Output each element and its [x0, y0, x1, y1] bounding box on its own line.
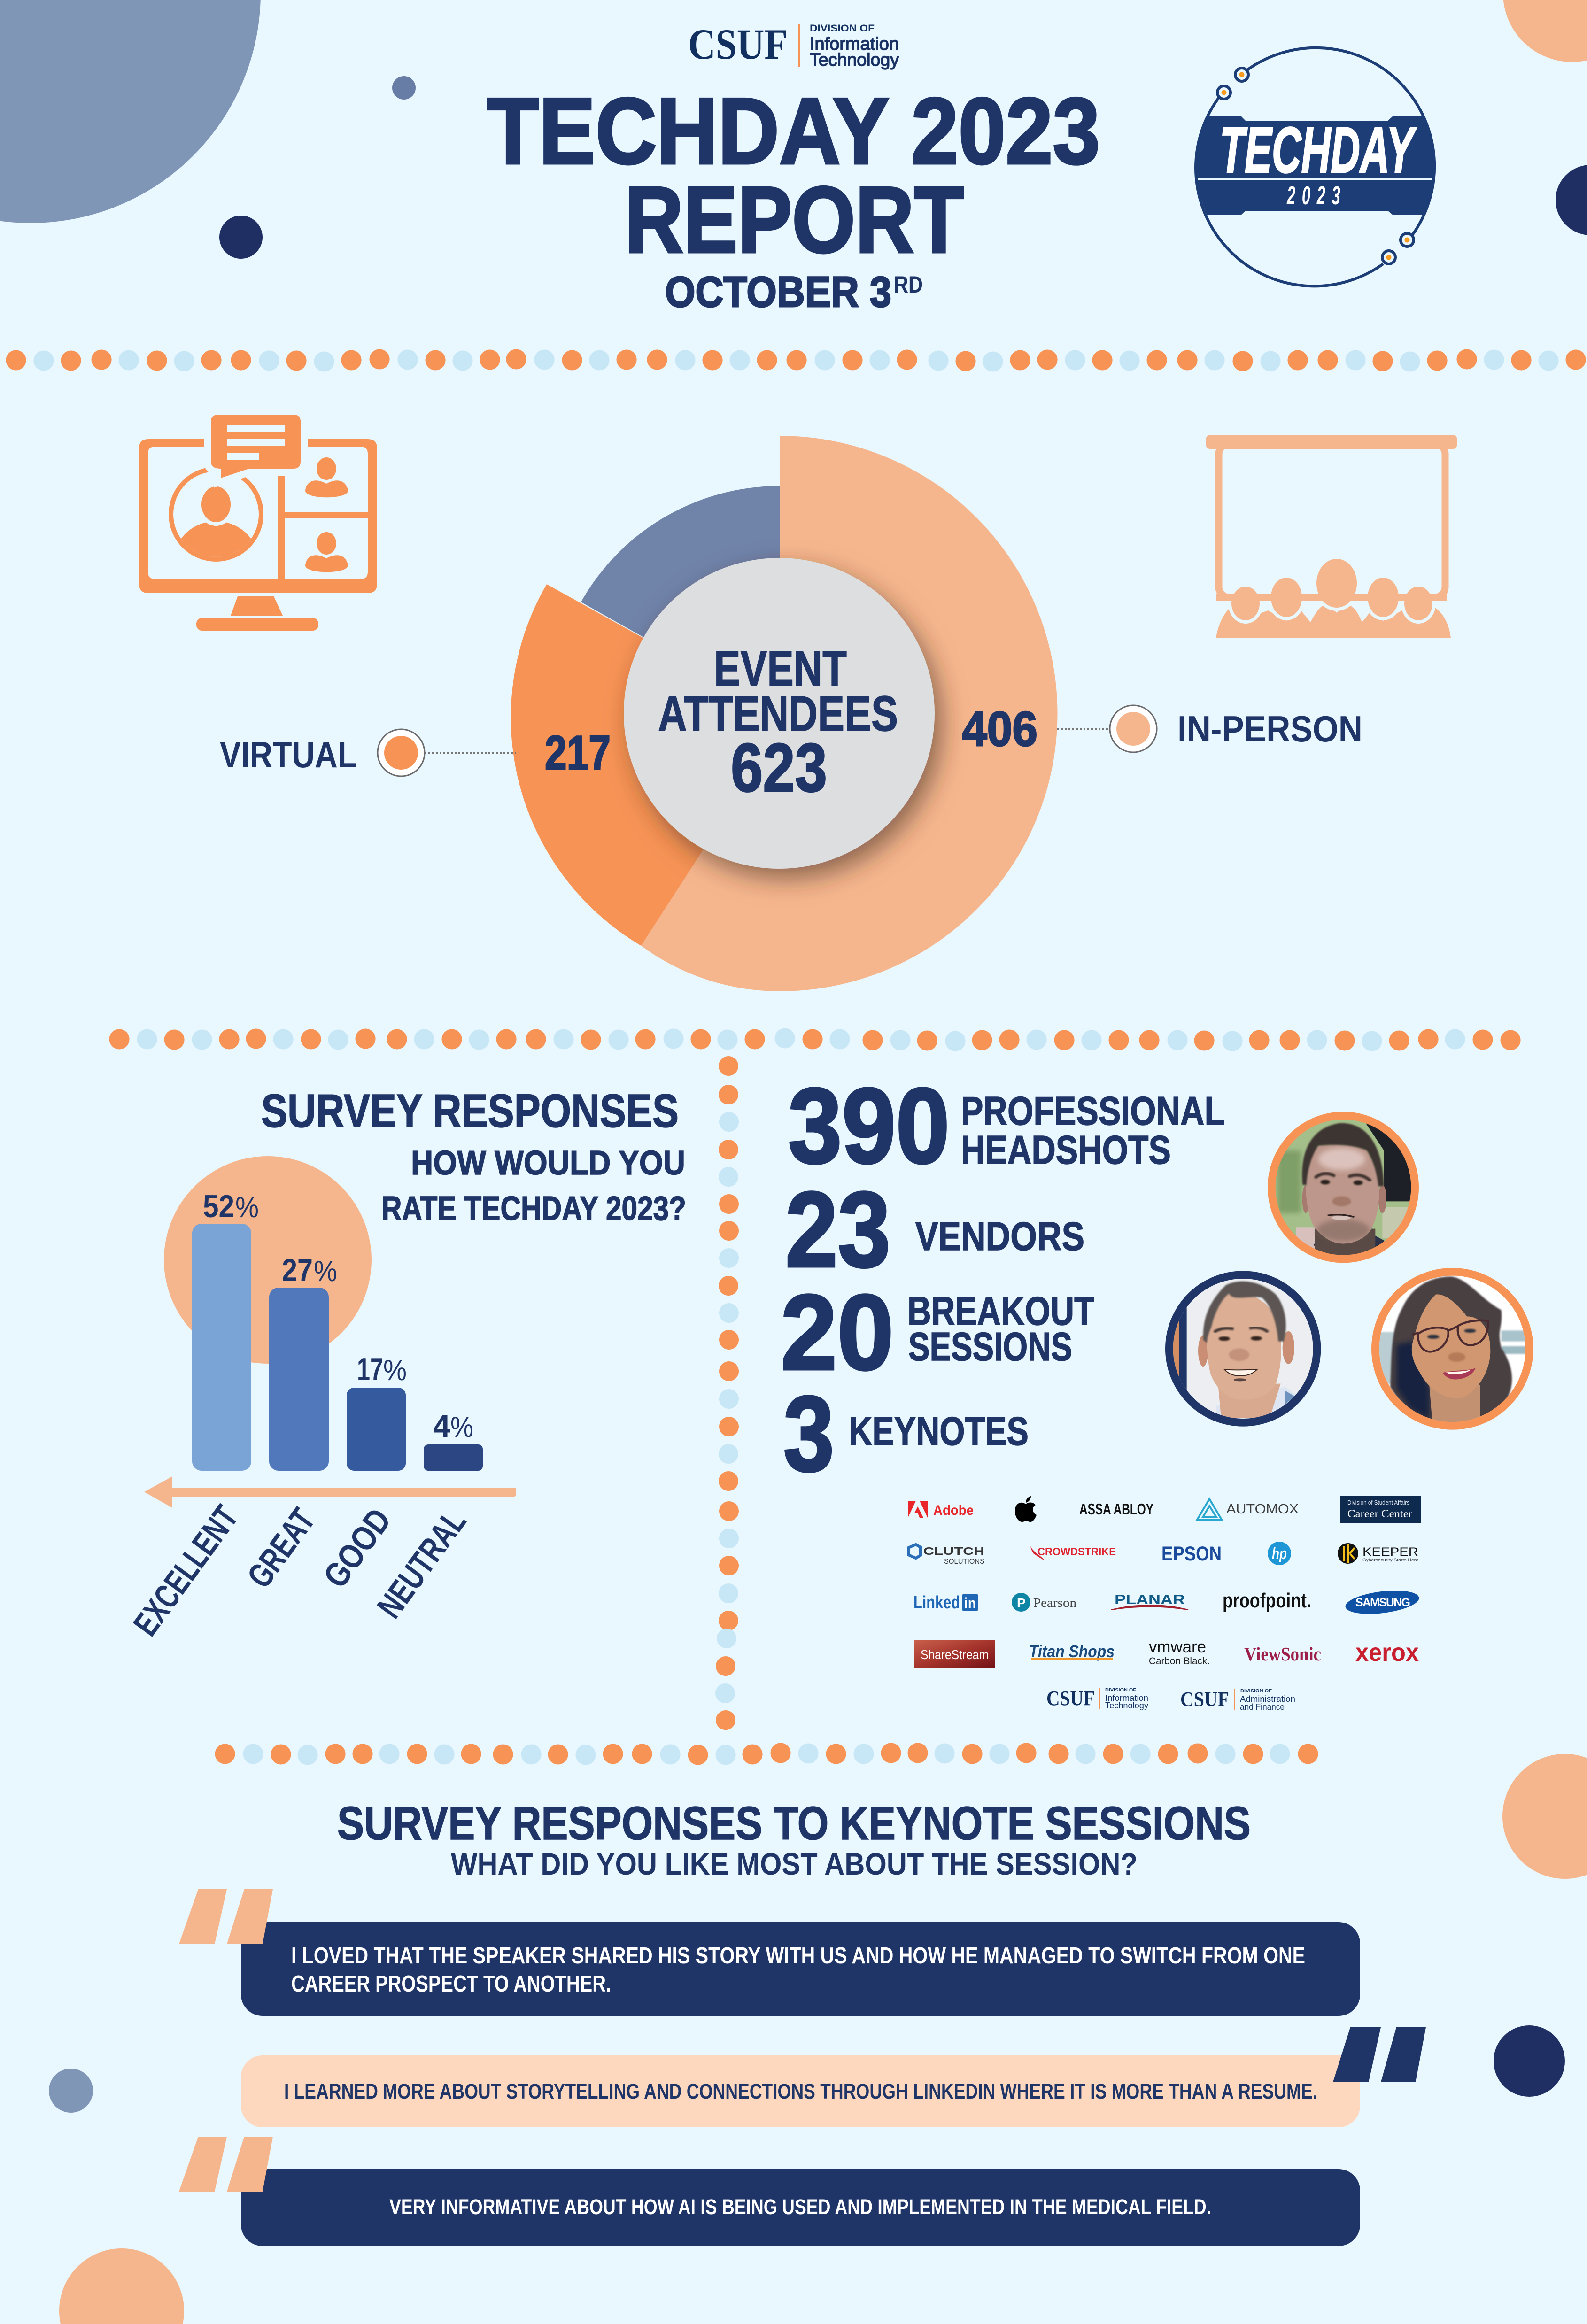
heading: survey responses [261, 1085, 686, 1228]
logo: ViewSonic: ViewSonic [1244, 1643, 1321, 1665]
logo: Adobe [908, 1501, 974, 1518]
quote card two [241, 2055, 1360, 2127]
bar: great [269, 1252, 337, 1471]
donut segment: virtual [511, 584, 791, 946]
logo: Pearson [1012, 1593, 1077, 1612]
logo: Automox: AUTOMOX [1226, 1502, 1299, 1517]
logo: LinkedIn: Linked [913, 1593, 960, 1613]
logo: Apple [1015, 1496, 1037, 1522]
bar: good [347, 1351, 407, 1471]
axis labels: GREAT [240, 1501, 323, 1595]
stat: keynotes: 3 [783, 1374, 834, 1494]
logo: Career Center [1340, 1496, 1421, 1523]
logo: LinkedIn: in [964, 1595, 976, 1612]
stat: headshots: HEADSHOTS [961, 1128, 1171, 1173]
logo: CSUF Information Technology: Technology [1105, 1701, 1148, 1710]
heading: keynote survey [337, 1797, 1251, 1881]
dotted divider top [16, 359, 1576, 362]
donut chart: event attendees [511, 436, 1058, 991]
logo: CSUF Information Technology: DIVISION OF [1105, 1688, 1136, 1693]
TechDay badge: 2023 [1286, 181, 1347, 210]
stat: keynotes [783, 1374, 1029, 1494]
title [487, 79, 1100, 272]
stat: headshots [788, 1066, 1225, 1186]
centre label: ATTENDEES [658, 686, 898, 741]
logo: Proofpoint: proofpoint. [1223, 1589, 1311, 1612]
date: RD [894, 271, 923, 298]
logo: Clutch Solutions: SOLUTIONS [944, 1558, 984, 1566]
icon: in-person audience and screen [1206, 435, 1457, 638]
logo: Clutch Solutions [908, 1544, 984, 1566]
logo: Career Center: Career Center [1347, 1508, 1412, 1520]
donut segment: in-person [641, 436, 1058, 991]
logo: CSUF Administration and Finance: Administration [1240, 1694, 1295, 1704]
logo: CrowdStrike: CROWDSTRIKE [1037, 1545, 1116, 1558]
stat: vendors: 23 [785, 1170, 890, 1289]
bar: neutral: % [450, 1411, 473, 1444]
title: TECHDAY 2023 [487, 79, 1100, 184]
bar: good: % [383, 1354, 407, 1387]
bar: good: 17 [357, 1351, 383, 1387]
logo: VMware Carbon Black [1149, 1637, 1210, 1667]
dotted divider middle [119, 1038, 1510, 1041]
stat: breakout sessions: SESSIONS [908, 1325, 1072, 1369]
bar chart: TechDay rating [164, 1156, 483, 1471]
legend: in-person: IN-PERSON [1177, 708, 1362, 749]
logo: Pearson: P [1017, 1596, 1026, 1610]
portrait: keynote speaker one [1271, 1116, 1415, 1259]
logo: Pearson: Pearson [1033, 1596, 1077, 1610]
stat: vendors [785, 1170, 1084, 1289]
logo: Keeper [1338, 1543, 1418, 1564]
logo: Keeper: Cybersecurity Starts Here [1362, 1558, 1418, 1562]
axis labels: GOOD [316, 1501, 399, 1595]
logo: Adobe: Adobe [933, 1503, 974, 1518]
bar: neutral: 4 [433, 1408, 450, 1444]
stat: breakout sessions: BREAKOUT [907, 1289, 1094, 1334]
logo: ShareStream [914, 1640, 995, 1668]
logo: Samsung [1344, 1587, 1420, 1617]
logo: Automox [1197, 1499, 1299, 1520]
in-person value: 406 [962, 702, 1037, 757]
CSUF division logo [688, 20, 899, 70]
stat: vendors: VENDORS [915, 1214, 1084, 1259]
centre label: 623 [731, 729, 827, 806]
logo: CSUF Administration and Finance: CSUF [1180, 1688, 1229, 1711]
icon: opening quote one [179, 1889, 273, 1944]
centre label: EVENT [714, 641, 847, 696]
title: REPORT [625, 168, 964, 272]
logo: Samsung: SAMSUNG [1355, 1596, 1410, 1609]
portrait: keynote speaker two [1169, 1275, 1317, 1422]
quote card one [241, 1922, 1360, 2016]
logo: VMware Carbon Black: Carbon Black. [1149, 1656, 1210, 1667]
logo: HP [1268, 1542, 1291, 1565]
logo: Planar [1111, 1592, 1188, 1610]
centre label [658, 641, 898, 806]
stat: headshots: PROFESSIONAL [961, 1089, 1225, 1134]
stat: breakout sessions: 20 [781, 1273, 894, 1392]
legend: virtual [220, 729, 516, 776]
axis labels: NEUTRAL [370, 1503, 473, 1625]
icon: opening quote two [179, 2137, 273, 2192]
quote card three: VERY INFORMATIVE ABOUT HOW AI IS BEING USED AND IMPLEMENTED IN THE MEDICAL FIELD. [389, 2195, 1211, 2219]
stat: headshots: 390 [788, 1066, 950, 1186]
logo: CSUF Administration and Finance [1180, 1688, 1295, 1712]
logo: VMware Carbon Black: vmware [1149, 1637, 1206, 1656]
logo: Career Center: Division of Student Affairs [1347, 1499, 1409, 1506]
CSUF division logo: Information [810, 34, 899, 54]
logo: Epson: EPSON [1161, 1543, 1222, 1565]
bar: excellent: 52 [203, 1189, 234, 1224]
quote card one: I LOVED THAT THE SPEAKER SHARED HIS STORY WITH US AND HOW HE MANAGED TO SWITCH FROM ONE [291, 1943, 1305, 1969]
stat: keynotes: KEYNOTES [849, 1409, 1029, 1454]
dotted divider vertical [725, 1066, 729, 1720]
donut segment: remainder [581, 486, 780, 714]
legend: virtual: VIRTUAL [220, 734, 357, 775]
TechDay badge [1194, 46, 1436, 287]
icon: closing quote [1333, 2027, 1426, 2082]
logo: Clutch Solutions: CLUTCH [923, 1545, 984, 1557]
logo: CSUF Information Technology: CSUF [1046, 1687, 1095, 1710]
logo: Xerox: xerox [1355, 1638, 1419, 1667]
logo: CSUF Administration and Finance: and Finance [1240, 1702, 1285, 1712]
TechDay badge: TECHDAY [1220, 114, 1417, 186]
arrow: rating scale [144, 1476, 516, 1508]
sponsor logos [908, 1496, 1421, 1712]
logo: HP: hp [1272, 1545, 1287, 1563]
date: OCTOBER 3 [665, 268, 891, 316]
logo: CSUF Information Technology [1046, 1687, 1148, 1710]
dotted divider bottom [225, 1753, 1308, 1755]
logo: Planar: PLANAR [1115, 1592, 1185, 1607]
quote card one: CAREER PROSPECT TO ANOTHER. [291, 1971, 611, 1997]
axis labels [126, 1498, 473, 1643]
CSUF division logo: Technology [810, 50, 899, 70]
bar: great: 27 [282, 1252, 313, 1288]
bar: great: % [314, 1255, 337, 1288]
logo: Keeper: KEEPER [1362, 1545, 1418, 1559]
bar: excellent [192, 1189, 259, 1471]
heading: survey responses: SURVEY RESPONSES [261, 1085, 679, 1137]
logo: CSUF Information Technology: Information [1105, 1693, 1148, 1703]
virtual value: 217 [545, 726, 611, 780]
logo: Assa Abloy: ASSA ABLOY [1079, 1500, 1153, 1518]
heading: survey responses: HOW WOULD YOU [411, 1144, 685, 1182]
logo: ShareStream: ShareStream [921, 1647, 989, 1662]
quote card two: I LEARNED MORE ABOUT STORYTELLING AND CONNECTIONS THROUGH LINKEDIN WHERE IT IS MORE THAN A RESUME. [284, 2079, 1317, 2103]
CSUF division logo: CSUF [688, 20, 788, 68]
portrait: keynote speaker three [1375, 1272, 1529, 1426]
quote card three [241, 2169, 1360, 2246]
legend: in-person [1057, 705, 1362, 752]
donut centre [624, 558, 935, 869]
stat: breakout sessions [781, 1273, 1094, 1392]
heading: keynote survey: WHAT DID YOU LIKE MOST ABOUT THE SESSION? [451, 1846, 1138, 1881]
icon: virtual meeting monitor [139, 415, 377, 631]
bar: excellent: % [235, 1191, 259, 1224]
bar: neutral [424, 1408, 483, 1471]
CSUF division logo: DIVISION OF [810, 23, 875, 34]
axis labels: EXCELLENT [126, 1498, 246, 1643]
heading: survey responses: RATE TECHDAY 2023? [381, 1190, 686, 1228]
logo: CSUF Administration and Finance: DIVISION OF [1240, 1689, 1272, 1694]
logo: Titan Shops: Titan Shops [1029, 1642, 1115, 1661]
heading: keynote survey: SURVEY RESPONSES TO KEYNOTE SESSIONS [337, 1797, 1251, 1850]
